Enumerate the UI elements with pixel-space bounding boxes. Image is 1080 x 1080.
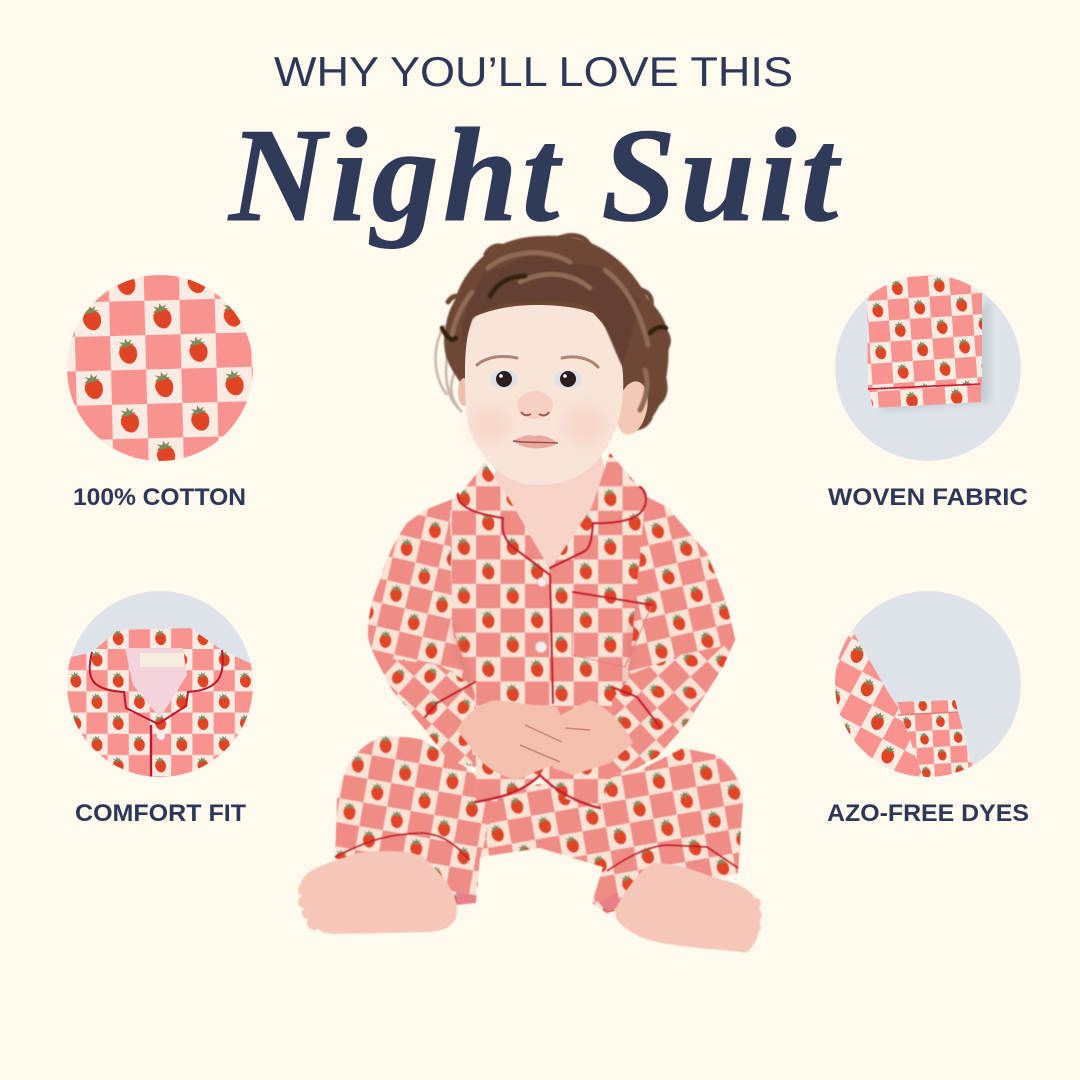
neck [490, 450, 610, 575]
circle: sleeve and trousers on grey [830, 591, 1021, 780]
shirt: red piping [425, 487, 660, 808]
left ear [458, 378, 470, 406]
label: azo-free dyes: AZO-FREE DYES [827, 800, 1029, 827]
hair highlights [452, 253, 648, 410]
hair shadows [442, 276, 666, 340]
shirt: right upper arm [629, 506, 732, 674]
shirt: buttons [536, 578, 546, 652]
neck label [140, 653, 184, 667]
shirt [367, 452, 736, 810]
left cheek [470, 407, 510, 443]
label: 100% cotton: 100% COTTON [73, 484, 246, 511]
trousers: right leg [480, 748, 743, 913]
panel: comfort fit [60, 591, 260, 827]
shirt: torso [440, 445, 645, 815]
title: night suit: Night Suit [227, 101, 842, 249]
right cheek [563, 405, 607, 445]
hair wisps left [435, 325, 462, 412]
right foot [615, 863, 762, 952]
trousers [335, 736, 743, 913]
circle: collar close-up [67, 591, 253, 777]
head [435, 236, 668, 485]
shirt: left forearm [384, 658, 476, 766]
shirt: right forearm [612, 645, 732, 772]
shirt: pocket edge [572, 592, 652, 667]
nose [517, 391, 553, 419]
eyes [490, 370, 582, 388]
label: comfort fit: COMFORT FIT [75, 800, 246, 827]
shirt: left upper arm [368, 508, 464, 679]
ear [612, 378, 652, 438]
trousers: piping [335, 833, 738, 871]
panel: woven fabric [828, 270, 1028, 511]
label: woven fabric: WOVEN FABRIC [828, 484, 1028, 511]
left foot [298, 851, 457, 934]
panel: 100% cotton [67, 275, 253, 511]
circle: folded sleeve on grey [835, 270, 1021, 461]
button [157, 732, 165, 740]
hair back [444, 236, 668, 428]
circle: cotton fabric close-up [67, 275, 253, 461]
figure: toddler in strawberry night suit [298, 236, 762, 952]
trousers: left leg [335, 736, 540, 904]
mouth [513, 435, 558, 448]
hands: finger creases [520, 725, 590, 762]
face [465, 305, 623, 485]
hair fringe [462, 255, 640, 366]
shirt: soft shadow under arms [452, 620, 632, 695]
trousers: inner cuff lining [456, 892, 620, 912]
hair curls outline [448, 236, 668, 428]
hands [457, 700, 633, 780]
collar lining [125, 648, 187, 718]
panel: azo-free dyes [827, 591, 1029, 827]
brows [477, 356, 598, 367]
heading: why you'll love this: WHY YOU’LL LOVE THIS [274, 48, 793, 95]
